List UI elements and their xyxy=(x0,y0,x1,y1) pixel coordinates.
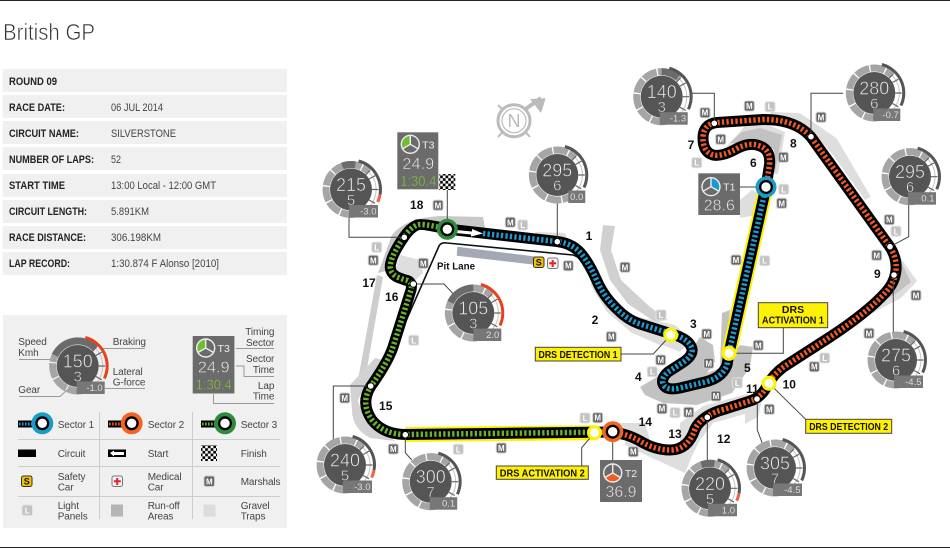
row: number of laps: NUMBER OF LAPS: xyxy=(9,154,94,166)
gauge: 305 km/h: 7 xyxy=(771,470,779,488)
legend: sector 1 xyxy=(18,412,95,434)
row: circuit name xyxy=(2,121,287,144)
pit lane label: Pit Lane xyxy=(437,260,475,272)
sector 2 track xyxy=(612,119,896,450)
sector 3 track xyxy=(366,224,612,434)
gauge: 140 km/h: 3 xyxy=(658,99,666,116)
legend: safety car: Car xyxy=(58,482,74,494)
light panels: L xyxy=(694,159,699,168)
gauge: 240 km/h xyxy=(320,436,374,493)
light panels: L xyxy=(374,243,379,252)
sector markers xyxy=(437,176,776,442)
legend: circuit xyxy=(18,449,86,460)
legend gauge captions: Gear xyxy=(18,385,41,396)
light panels: L xyxy=(673,409,678,418)
gauge: 215 km/h: 5 xyxy=(347,192,355,209)
marshal posts: M xyxy=(703,330,710,339)
legend: safety car xyxy=(22,472,86,494)
turn numbers: 9 xyxy=(874,267,881,281)
turn numbers: 3 xyxy=(690,317,697,331)
gauge: 215 km/h: 215 xyxy=(336,175,366,195)
gauge: 295 km/h turn 9: 6 xyxy=(906,179,914,196)
bottom rule xyxy=(0,547,950,548)
marshal posts: M xyxy=(702,109,709,118)
gauge: 280 km/h xyxy=(849,64,904,121)
row: circuit length xyxy=(2,200,287,223)
callout: DRS activation 1 xyxy=(758,303,828,328)
gauge: 240 km/h: 240 xyxy=(330,450,360,470)
turn numbers: 12 xyxy=(717,432,731,446)
marshal posts: M xyxy=(622,263,629,272)
gauge: 215 km/h xyxy=(326,161,380,218)
legend: run-off areas: Areas xyxy=(148,512,173,522)
gauge: 280 km/h: -0.7 xyxy=(882,110,899,121)
legend gauge: 3 xyxy=(74,368,82,386)
gauge: 305 km/h xyxy=(750,440,804,496)
gauge: 295 km/h turn 1 xyxy=(532,146,587,203)
legend: light panels: L xyxy=(25,506,30,515)
legend: light panels: Panels xyxy=(58,512,88,522)
title: British GP xyxy=(3,19,95,45)
timing box: T2 xyxy=(600,460,642,502)
timing box: T3: 1:30.4 xyxy=(400,173,436,190)
legend gauge captions: Speed xyxy=(18,337,47,348)
row: start time: 13:00 Local - 12:00 GMT xyxy=(111,180,216,192)
legend: sector 2 xyxy=(108,412,185,434)
timing box: T3: 24.9 xyxy=(402,156,434,173)
turn numbers: 7 xyxy=(688,138,695,152)
legend timing box: 1:30.4 xyxy=(196,376,232,394)
legend gauge captions xyxy=(18,337,146,396)
gauge: 105 km/h: 105 xyxy=(458,298,488,318)
gauge: 305 km/h: -4.5 xyxy=(784,485,800,496)
row: race date: RACE DATE: xyxy=(9,102,65,114)
legend: start: Start xyxy=(148,449,169,460)
legend: gravel traps: Traps xyxy=(241,512,265,522)
gauge: 140 km/h: 140 xyxy=(647,82,677,102)
legend: safety car: S xyxy=(24,476,30,486)
row: circuit length: CIRCUIT LENGTH: xyxy=(9,206,87,218)
marshal posts: M xyxy=(755,341,762,350)
light panels: L xyxy=(583,414,588,423)
legend: marshals: M xyxy=(206,477,213,486)
legend: medical car: Medical xyxy=(148,472,181,483)
marshal posts: M xyxy=(913,291,920,300)
light panels: L xyxy=(411,336,416,345)
legend gauge xyxy=(53,338,107,394)
timing box: T2: T2 xyxy=(625,468,637,480)
legend: medical car: Car xyxy=(148,482,164,494)
legend: finish xyxy=(201,445,267,461)
icon: safety car xyxy=(534,257,544,268)
marshal posts: M xyxy=(866,329,873,338)
marshal posts: M xyxy=(717,135,724,144)
legend: sector 1: Sector 1 xyxy=(58,420,95,431)
pit lane xyxy=(402,243,598,330)
legend: run-off areas: Run-off xyxy=(148,501,180,512)
light panels: L xyxy=(822,354,827,363)
gauge: 300 km/h: 0.1 xyxy=(442,499,455,510)
light panels: L xyxy=(735,379,740,388)
gauge: 295 km/h turn 1: 295 xyxy=(542,160,572,180)
legend timing captions: Time xyxy=(253,365,275,376)
light panels: L xyxy=(659,311,664,320)
light panels: L xyxy=(650,368,655,377)
legend: light panels: Light xyxy=(58,501,79,512)
legend timing captions: Sector xyxy=(246,338,275,349)
gauge: 105 km/h xyxy=(448,284,503,341)
icon: medical car xyxy=(548,258,558,268)
legend: sector 3: Sector 3 xyxy=(241,420,278,431)
legend timing box: T3 xyxy=(218,343,230,355)
turn numbers: 6 xyxy=(750,156,757,170)
gauge: 215 km/h: -3.0 xyxy=(360,206,376,218)
icon: finish flag xyxy=(439,174,455,190)
icon: safety car: S xyxy=(536,258,542,268)
row: lap record xyxy=(2,252,287,275)
legend: finish: Finish xyxy=(241,449,267,460)
callout: DRS activation 2: DRS ACTIVATION 2 xyxy=(500,468,585,480)
gauge: 220 km/h: 5 xyxy=(706,491,714,508)
legend gauge: 150 xyxy=(63,352,93,372)
timing box: T3: T3 xyxy=(422,139,435,151)
gauge: 295 km/h turn 9: 0.1 xyxy=(921,194,934,205)
gauge: 240 km/h: 5 xyxy=(341,468,349,484)
sector 3 marker xyxy=(437,219,458,240)
marshal posts: M xyxy=(507,218,514,227)
gauge: 220 km/h: 220 xyxy=(695,474,725,494)
compass xyxy=(498,98,546,137)
marshal posts: M xyxy=(811,363,818,372)
turn numbers: 5 xyxy=(744,361,751,375)
light panels xyxy=(372,102,901,454)
gauge: 280 km/h: 6 xyxy=(870,96,878,112)
timing box: T1 xyxy=(698,173,740,215)
legend gauge captions: G-force xyxy=(113,378,146,388)
legend timing captions: Timing xyxy=(245,327,274,338)
legend gauge captions: Braking xyxy=(113,337,146,348)
marshal posts: M xyxy=(657,356,664,365)
gauge: 295 km/h turn 9: 295 xyxy=(895,162,925,182)
legend: light panels xyxy=(22,501,88,522)
sector 1 marker xyxy=(756,176,776,198)
callout: DRS detection 2: DRS DETECTION 2 xyxy=(809,421,888,433)
turn numbers: 16 xyxy=(385,290,399,304)
light panels: L xyxy=(456,445,461,454)
legend: marshals xyxy=(204,476,281,488)
leader lines xyxy=(333,93,909,466)
legend timing box: 24.9 xyxy=(198,360,230,377)
legend: run-off areas xyxy=(111,501,180,522)
turn numbers xyxy=(362,136,881,446)
gauge: 105 km/h: 2.0 xyxy=(486,330,499,341)
marshal posts: M xyxy=(733,256,740,265)
legend: gravel traps xyxy=(204,501,270,522)
legend timing captions xyxy=(245,327,275,402)
panel: legend xyxy=(3,315,287,528)
row: lap record: LAP RECORD: xyxy=(9,258,70,270)
gauge: 105 km/h: 3 xyxy=(469,316,477,332)
gauge: 295 km/h turn 1: 6 xyxy=(553,178,561,194)
circuit xyxy=(366,119,896,450)
row: race date: 06 JUL 2014 xyxy=(111,102,163,114)
legend: sector 2: Sector 2 xyxy=(148,420,185,431)
DRS zones xyxy=(405,187,766,434)
marshal posts: M xyxy=(778,199,785,208)
gauge: 140 km/h: -1.3 xyxy=(670,114,686,125)
legend timing captions: Time xyxy=(253,392,275,402)
callout: DRS activation 1: ACTIVATION 1 xyxy=(762,314,824,326)
row: number of laps: 52 xyxy=(111,154,121,166)
legend: gravel traps: Gravel xyxy=(241,501,270,512)
run-off and gravel areas xyxy=(350,112,917,473)
light panels: L xyxy=(894,227,899,236)
marshal posts xyxy=(340,101,921,457)
callout: DRS activation 1: DRS xyxy=(782,304,804,316)
light panels: L xyxy=(762,257,767,266)
gauge: 140 km/h xyxy=(637,68,691,125)
row: round: ROUND 09 xyxy=(9,76,57,88)
gauge: 295 km/h turn 9 xyxy=(885,148,939,205)
legend: circuit: Circuit xyxy=(58,449,86,460)
marshal posts: M xyxy=(341,394,348,403)
callout: DRS detection 1: DRS DETECTION 1 xyxy=(538,349,618,361)
gauge: 275 km/h: -4.5 xyxy=(905,377,922,388)
row: circuit length: 5.891KM xyxy=(111,206,149,218)
legend timing captions: Sector xyxy=(246,354,275,365)
DRS markers xyxy=(588,329,775,439)
turn numbers: 15 xyxy=(379,399,393,413)
legend: medical car xyxy=(112,472,181,494)
panel: race information xyxy=(2,69,287,275)
marshal posts: M xyxy=(608,333,615,342)
marshal posts: M xyxy=(873,251,880,260)
turn numbers: 11 xyxy=(746,382,759,396)
timing box: T1: T1 xyxy=(723,181,736,193)
timing box: T1: 28.6 xyxy=(704,197,735,214)
marshal posts: M xyxy=(818,113,825,122)
marshal posts: M xyxy=(685,408,692,417)
gauge: 300 km/h xyxy=(406,453,460,510)
marshal posts: M xyxy=(780,153,787,162)
turn numbers: 10 xyxy=(783,378,796,392)
legend timing captions: Lap xyxy=(258,381,275,392)
marshal posts: M xyxy=(746,102,753,111)
legend gauge: -1.0 xyxy=(86,383,103,394)
marshal posts: M xyxy=(766,405,773,414)
turn numbers: 14 xyxy=(639,415,652,429)
row: round xyxy=(2,69,287,92)
row: race distance xyxy=(2,226,287,249)
gauge: 275 km/h: 6 xyxy=(892,362,900,380)
turn numbers: 17 xyxy=(362,276,376,290)
gauge: 220 km/h: 1.0 xyxy=(722,505,735,516)
marshal posts: M xyxy=(565,262,572,271)
marshal posts: M xyxy=(594,414,601,423)
gauge: 275 km/h: 275 xyxy=(881,346,911,366)
sector 1 track xyxy=(447,187,766,389)
gauge: 240 km/h: -3.0 xyxy=(354,482,370,493)
marshal posts: M xyxy=(498,444,505,453)
legend: start xyxy=(108,449,169,460)
turn numbers: 18 xyxy=(410,198,424,212)
marshal posts: M xyxy=(659,405,666,414)
timing box: T2: 36.9 xyxy=(606,484,637,501)
turn numbers: 1 xyxy=(586,229,593,243)
turn numbers: 4 xyxy=(635,370,642,384)
row: race distance: 306.198KM xyxy=(111,232,161,244)
marshal posts: M xyxy=(630,448,637,457)
sector 2 marker xyxy=(602,421,623,442)
legend gauge captions: Kmh xyxy=(18,348,39,359)
row: circuit name: CIRCUIT NAME: xyxy=(9,128,79,140)
legend: sector 3 xyxy=(201,412,278,434)
row: circuit name: SILVERSTONE xyxy=(111,128,176,140)
turn numbers: 13 xyxy=(668,427,682,441)
compass: N xyxy=(508,111,520,131)
row: start time: START TIME xyxy=(9,180,65,192)
marshal posts: M xyxy=(713,392,720,401)
marshal posts: M xyxy=(420,259,427,268)
start arrow xyxy=(456,229,483,236)
row: lap record: 1:30.874 F Alonso [2010] xyxy=(111,258,219,270)
row: race distance: RACE DISTANCE: xyxy=(9,232,86,244)
gauge: 280 km/h: 280 xyxy=(859,78,889,98)
light panels: L xyxy=(781,185,786,194)
timing box: T3 xyxy=(397,132,438,190)
gauge: 295 km/h turn 1: 0.0 xyxy=(570,192,583,203)
turn numbers: 8 xyxy=(790,136,797,150)
gauge: 220 km/h xyxy=(685,460,739,516)
light panels: L xyxy=(520,221,525,230)
marshal posts: M xyxy=(435,201,442,210)
legend gauge captions: Lateral xyxy=(113,367,143,378)
marshal posts: M xyxy=(370,256,377,265)
marshal posts: M xyxy=(705,359,712,368)
light panels: L xyxy=(768,103,773,112)
marshal posts: M xyxy=(886,216,893,225)
gauge: 305 km/h: 305 xyxy=(760,454,790,474)
row: start time xyxy=(2,174,287,197)
row: race date xyxy=(2,95,287,118)
gauge: 275 km/h xyxy=(871,332,925,388)
gauge: 300 km/h: 7 xyxy=(427,484,435,501)
legend: marshals: Marshals xyxy=(241,477,281,488)
legend: safety car: Safety xyxy=(58,472,86,483)
row: number of laps xyxy=(2,147,287,170)
gauge: 300 km/h: 300 xyxy=(416,467,446,487)
corner dots xyxy=(367,120,897,438)
marshal posts: M xyxy=(390,445,397,454)
legend timing box xyxy=(193,336,234,394)
top rule xyxy=(0,0,950,1)
turn numbers: 2 xyxy=(592,313,599,327)
